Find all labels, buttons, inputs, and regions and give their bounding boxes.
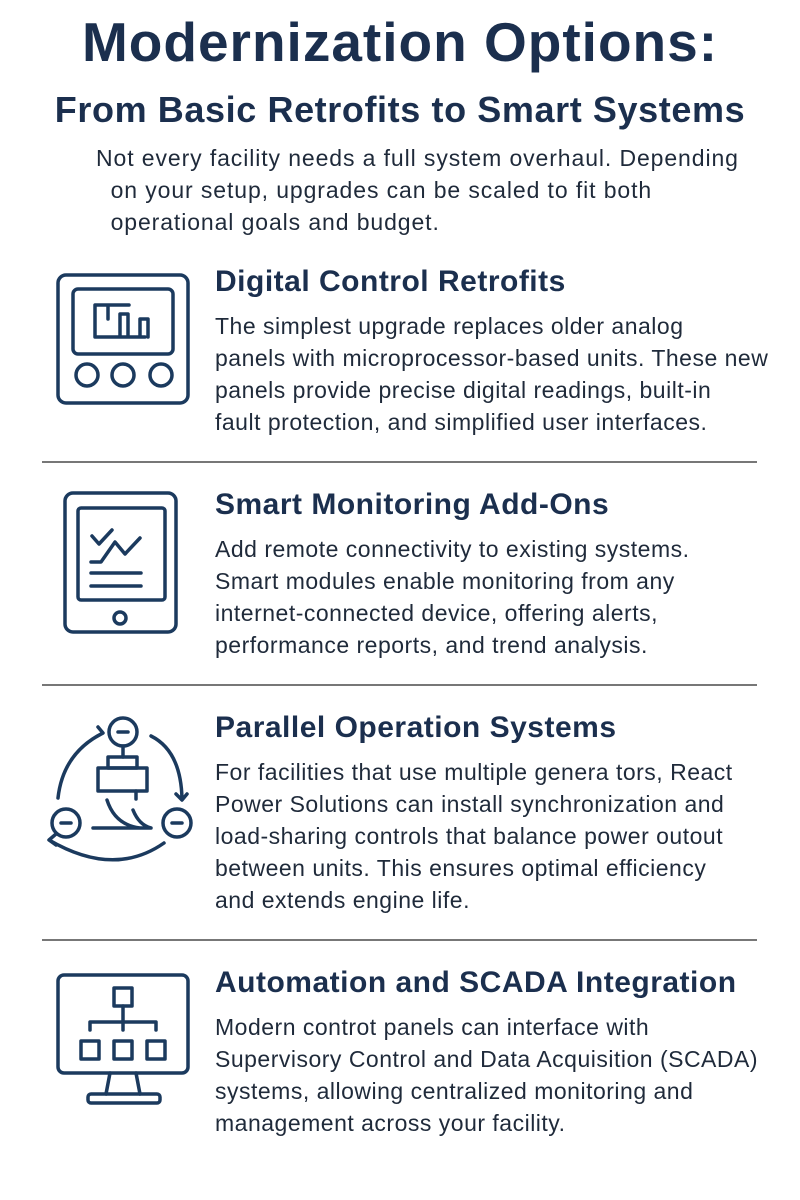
text: smart monitoring: Add remote connectivity to existing systems.: [215, 536, 690, 562]
subtitle: From Basic Retrofits to Smart Systems: [55, 89, 745, 130]
text: smart monitoring: Smart modules enable monitoring from any: [215, 568, 675, 594]
text: automation and scada: Supervisory Control and Data Acquisition (SCADA): [215, 1046, 758, 1072]
text: smart monitoring: performance reports, and trend analysis.: [215, 632, 648, 658]
text: digital control retrofits: [215, 313, 768, 435]
icon: SCADA monitor: [58, 975, 188, 1103]
text: automation and scada: Modern controt panels can interface with: [215, 1014, 649, 1040]
text: parallel operation: load-sharing controls that balance power outout: [215, 823, 723, 849]
heading: automation and scada: Automation and SCADA Integration: [215, 966, 737, 999]
text: automation and scada: systems, allowing centralized monitoring and: [215, 1078, 693, 1104]
intro text: operational goals and budget.: [111, 209, 440, 235]
heading: digital control retrofits: Digital Control Retrofits: [215, 265, 566, 298]
icon: control panel: [58, 275, 188, 403]
text: digital control retrofits: panels provide precise digital readings, built-in: [215, 377, 711, 403]
text: digital control retrofits: The simplest upgrade replaces older analog: [215, 313, 684, 339]
text: digital control retrofits: panels with microprocessor-based units. These new: [215, 345, 768, 371]
text: parallel operation: and extends engine life.: [215, 887, 470, 913]
text: digital control retrofits: fault protection, and simplified user interfaces.: [215, 409, 707, 435]
heading: parallel operation: Parallel Operation Systems: [215, 711, 617, 744]
heading: smart monitoring: Smart Monitoring Add-Ons: [215, 488, 609, 521]
icon: tablet: [65, 493, 176, 632]
icon: parallel operation cycle: [49, 718, 191, 860]
text: parallel operation: between units. This ensures optimal efficiency: [215, 855, 706, 881]
text: automation and scada: management across your facility.: [215, 1110, 566, 1136]
text: smart monitoring: [215, 536, 690, 658]
intro text: [96, 145, 739, 235]
intro text: on your setup, upgrades can be scaled to fit both: [111, 177, 652, 203]
text: automation and scada: [215, 1014, 758, 1136]
text: parallel operation: For facilities that use multiple genera tors, React: [215, 759, 733, 785]
title: Modernization Options:: [82, 11, 718, 73]
text: parallel operation: [215, 759, 733, 913]
text: parallel operation: Power Solutions can install synchronization and: [215, 791, 724, 817]
text: smart monitoring: internet-connected device, offering alerts,: [215, 600, 658, 626]
intro text: Not every facility needs a full system overhaul. Depending: [96, 145, 739, 171]
